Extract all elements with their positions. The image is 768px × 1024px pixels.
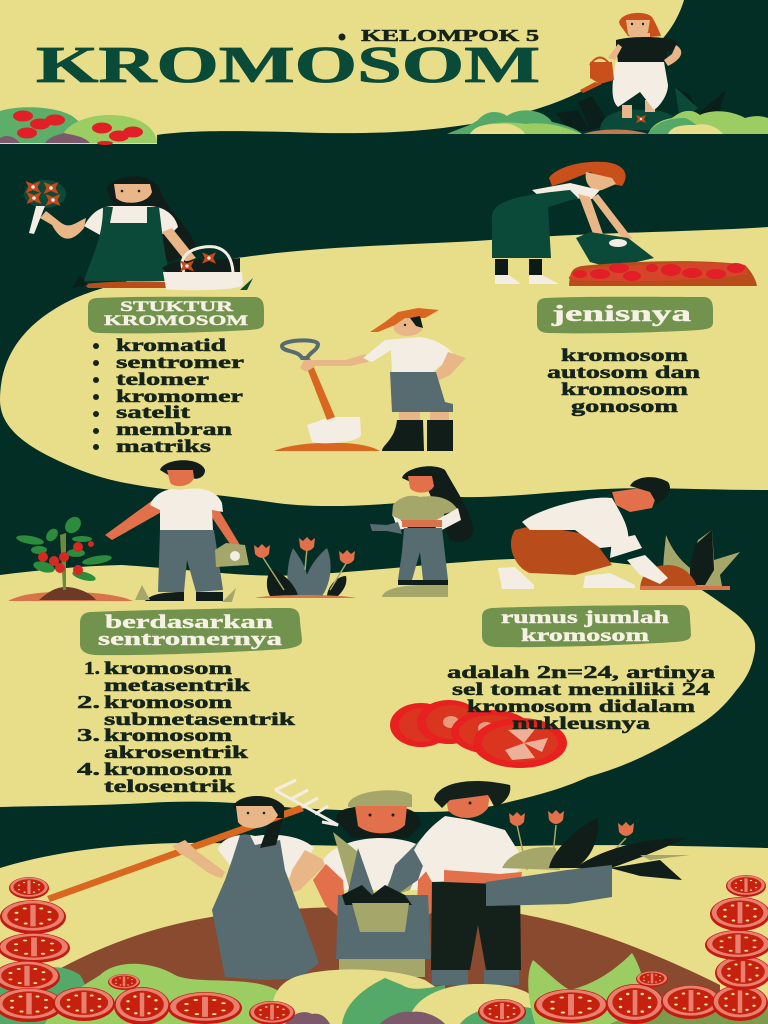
illustration: man with plant box xyxy=(414,781,690,985)
list: struktur kromosom: telomer xyxy=(116,369,209,389)
list: struktur kromosom: matriks xyxy=(116,436,211,456)
label pill: stuktur kromosom: STUKTUR xyxy=(120,299,233,315)
text: jenisnya description: kromosom xyxy=(561,345,688,365)
list: berdasarkan sentromer: telosentrik xyxy=(104,776,235,796)
right top bushes xyxy=(447,110,768,134)
text: rumus description xyxy=(447,662,715,733)
illustration: woman bending over tomatoes xyxy=(492,162,757,286)
label pill: stuktur kromosom xyxy=(88,297,264,333)
illustration: woman with watering can xyxy=(556,13,726,132)
illustration: kneeling woman with flowers and basket xyxy=(24,176,253,290)
list: berdasarkan sentromer: submetasentrik xyxy=(104,709,295,729)
title: KROMOSOM xyxy=(36,37,540,94)
list: struktur kromosom: kromomer xyxy=(116,386,243,406)
panel: bottom cream ground xyxy=(0,843,768,1024)
list: struktur kromosom: satelit xyxy=(116,402,190,422)
list: berdasarkan sentromer: 1. xyxy=(84,658,100,678)
list: berdasarkan sentromer: kromosom xyxy=(104,692,232,712)
illustration: flowers xyxy=(254,537,356,598)
label pill: berdasarkan sentromernya xyxy=(80,608,302,655)
illustration: tomato halves border xyxy=(0,875,768,1024)
label pill: berdasarkan sentromernya: sentromernya xyxy=(98,629,283,650)
list: berdasarkan sentromer xyxy=(77,658,295,796)
illustration: bottom shrubs xyxy=(0,953,768,1024)
illustration: woman with hose xyxy=(370,466,474,597)
text: jenisnya description: autosom dan xyxy=(547,362,700,382)
list: struktur kromosom: membran xyxy=(116,419,232,439)
illustration: man with seed bag xyxy=(105,460,249,602)
illustration: person holding potted plant xyxy=(313,790,445,977)
list: struktur kromosom: sentromer xyxy=(116,352,244,372)
list: berdasarkan sentromer: kromosom xyxy=(104,658,232,678)
illustration: kneeling man planting xyxy=(498,477,740,590)
text: rumus description: nukleusnya xyxy=(512,713,650,733)
subtitle: KELOMPOK 5 xyxy=(361,26,539,45)
list: berdasarkan sentromer: akrosentrik xyxy=(104,742,248,762)
illustration: farmer with shovel xyxy=(274,308,466,451)
illustration: tomato plant xyxy=(8,514,133,601)
illustration: tomato slices xyxy=(390,700,567,768)
text: jenisnya description xyxy=(547,345,700,416)
panel: lower cream wave xyxy=(0,559,755,812)
left top bushes xyxy=(0,107,157,145)
label pill: jenisnya xyxy=(537,297,713,333)
illustration: woman with rake xyxy=(47,780,338,980)
text: rumus description: sel tomat memiliki 24 xyxy=(452,679,710,699)
label pill: rumus jumlah kromosom: rumus jumlah xyxy=(501,607,669,627)
text: jenisnya description: kromosom xyxy=(561,379,688,399)
label pill: stuktur kromosom: KROMOSOM xyxy=(104,313,248,329)
label pill: rumus jumlah kromosom xyxy=(482,605,691,647)
text: jenisnya description: gonosom xyxy=(571,396,678,416)
list: berdasarkan sentromer: 4. xyxy=(77,759,100,779)
panel: top cream wave xyxy=(0,0,684,144)
list: berdasarkan sentromer: metasentrik xyxy=(104,675,250,695)
panel: middle cream wave xyxy=(0,227,768,506)
list: berdasarkan sentromer: kromosom xyxy=(104,759,232,779)
list: berdasarkan sentromer: 3. xyxy=(77,725,100,745)
soil mound xyxy=(40,906,720,1024)
label pill: jenisnya: jenisnya xyxy=(550,301,692,326)
list: berdasarkan sentromer: 2. xyxy=(77,692,100,712)
label pill: rumus jumlah kromosom: kromosom xyxy=(521,625,649,645)
text: rumus description: kromosom didalam xyxy=(467,696,695,716)
subtitle xyxy=(338,26,539,45)
label pill: berdasarkan sentromernya: berdasarkan xyxy=(105,612,274,633)
list: struktur kromosom xyxy=(93,335,244,456)
list: struktur kromosom: kromatid xyxy=(116,335,226,355)
text: rumus description: adalah 2n=24, artinya xyxy=(447,662,715,682)
list: berdasarkan sentromer: kromosom xyxy=(104,725,232,745)
